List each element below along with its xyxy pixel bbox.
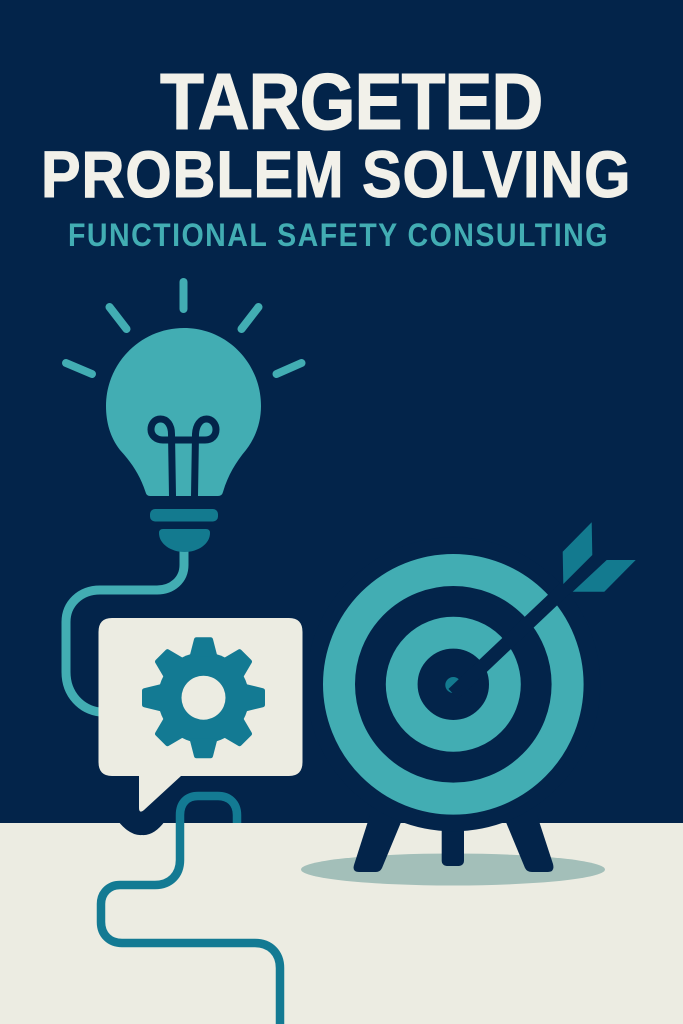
- arrow shaft: [453, 587, 567, 694]
- bulb filament: [151, 419, 216, 496]
- icon: light bulb: [66, 282, 302, 552]
- icon: target with arrow: [306, 522, 636, 872]
- bulb rays: [66, 282, 302, 374]
- subtitle: FUNCTIONAL SAFETY CONSULTING: [68, 217, 607, 253]
- target shadow: [301, 854, 605, 886]
- lower connector wire: [101, 796, 280, 1024]
- target stand: [354, 815, 553, 872]
- target backing: [306, 537, 600, 831]
- title: TARGETED: [160, 58, 543, 147]
- arrow fletching: [563, 522, 636, 592]
- icon: gear: [142, 637, 265, 758]
- bubble tail backing: [118, 821, 165, 835]
- bulb collar: [150, 509, 218, 522]
- title: PROBLEM SOLVING: [41, 138, 631, 212]
- outer ring: [339, 570, 568, 799]
- bullseye: [445, 677, 461, 693]
- speech bubble: [98, 618, 302, 812]
- inner ring: [402, 633, 505, 736]
- bulb cap: [159, 529, 210, 552]
- upper connector wire: [66, 550, 184, 712]
- speech bubble with gear: [98, 618, 302, 835]
- bulb glass: [106, 328, 261, 496]
- title: [41, 58, 630, 212]
